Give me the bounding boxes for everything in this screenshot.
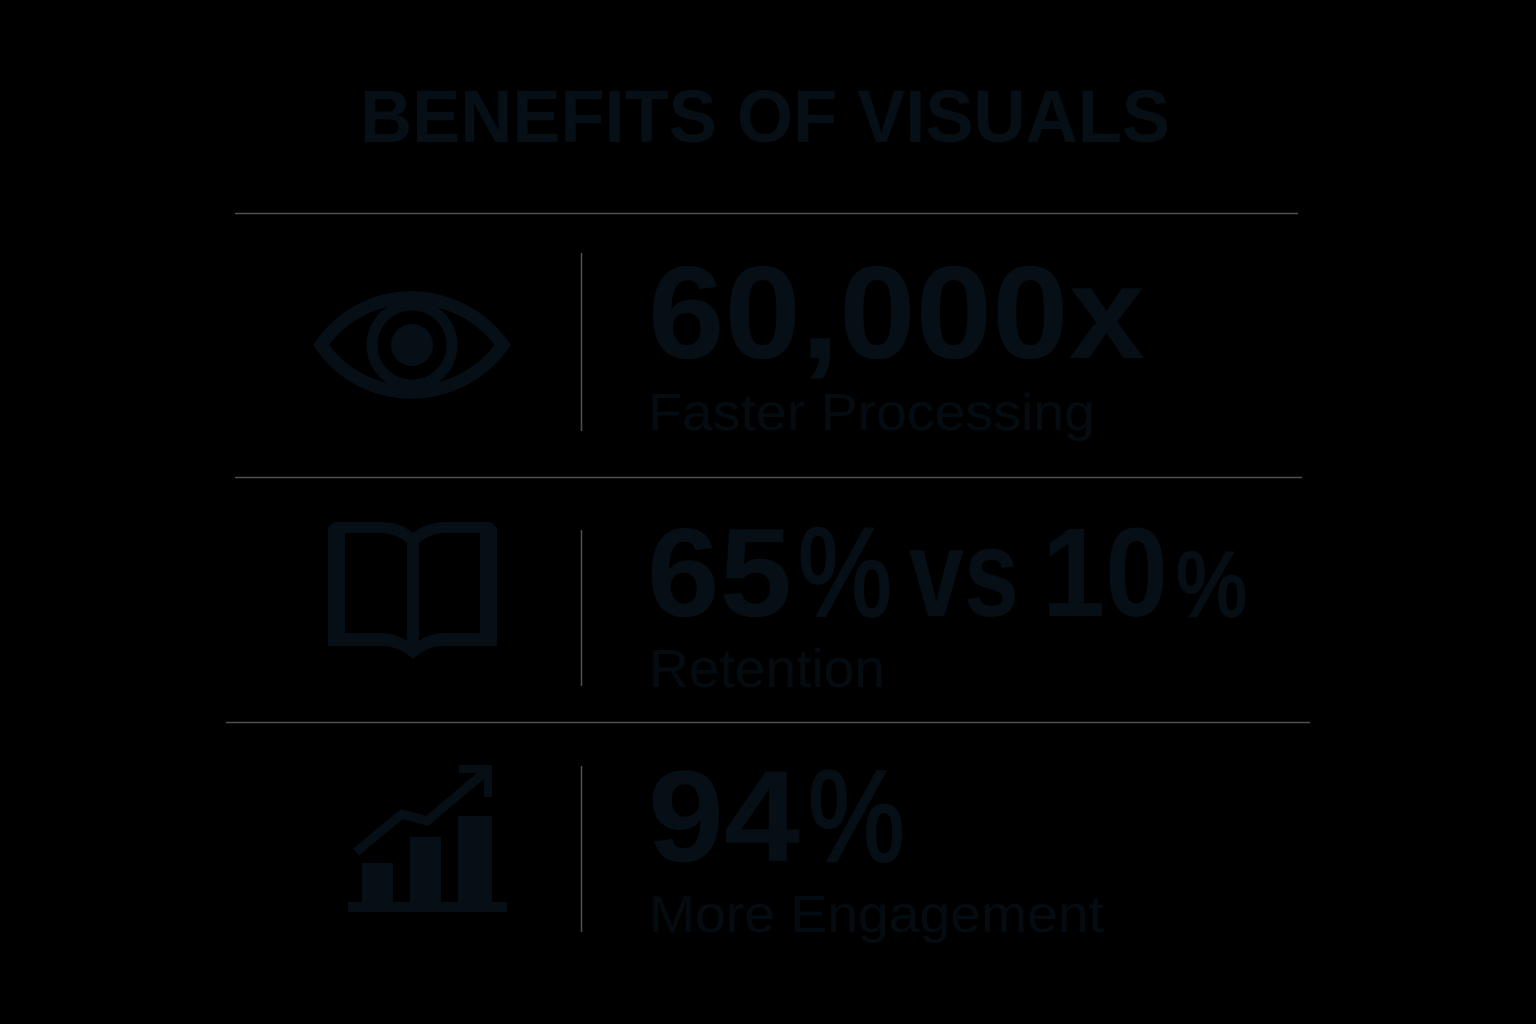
stat: 65% vs 10%: % xyxy=(1176,534,1247,636)
stat: 60,000x: 60,000x xyxy=(648,239,1145,386)
title: BENEFITS OF VISUALS xyxy=(360,75,1170,158)
label: more engagement: More Engagement xyxy=(649,886,1105,944)
icon: eye xyxy=(321,298,503,392)
label: faster processing: Faster Processing xyxy=(648,384,1095,442)
panel: faster processing xyxy=(321,239,1145,442)
stat: 94%: % xyxy=(808,743,905,889)
label: retention: Retention xyxy=(649,639,885,699)
icon: growth chart xyxy=(348,769,507,912)
stat: 65% vs 10%: 65 xyxy=(647,502,792,643)
stat: 94% xyxy=(648,743,905,889)
stat: 65% vs 10%: vs xyxy=(909,505,1019,643)
stat: 94%: 94 xyxy=(648,743,800,889)
panel: more engagement xyxy=(348,743,1105,944)
stat: 65% vs 10%: 10 xyxy=(1042,502,1168,643)
panel: retention xyxy=(328,502,1247,699)
icon: open book xyxy=(328,522,497,659)
stat: 65% vs 10% xyxy=(647,502,1247,643)
stat: 65% vs 10%: % xyxy=(798,502,892,643)
